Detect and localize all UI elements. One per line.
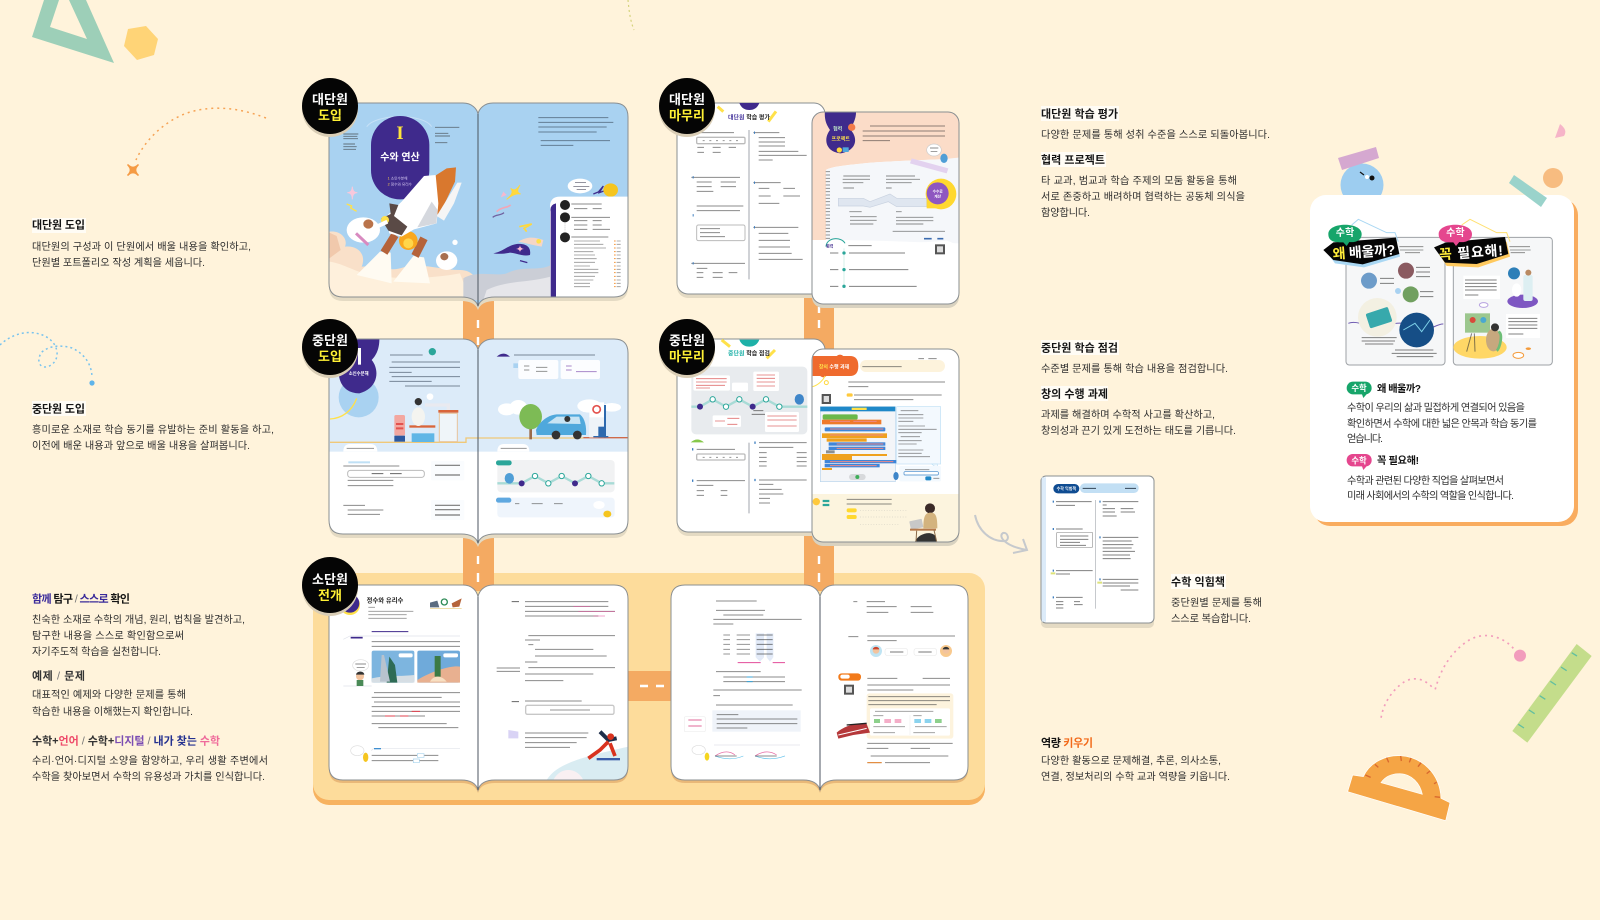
road: horizontal connector <box>627 671 672 701</box>
concept map <box>691 367 807 434</box>
page title: 중단원 학습 점검 <box>728 350 770 358</box>
text lines: intro copy <box>538 118 613 145</box>
text block: 왜 배울까?: 수학이 우리의 삶과 밀접하게 연결되어 있음을 <box>1347 401 1525 414</box>
decoration: teal bar over card edge <box>1509 175 1547 207</box>
illustration: ice skater with ice field <box>508 730 628 780</box>
page title: 대단원 학습 평가 <box>728 113 770 121</box>
badge: 중단원 마무리: 마무리 <box>669 349 705 364</box>
text block: 역량 키우기 <box>1041 736 1230 783</box>
book: 대단원 도입 spread <box>329 103 630 310</box>
road: left vertical <box>463 296 494 591</box>
text lines: left page corner notes <box>343 127 459 149</box>
title tag: 수학 꼭 필요해!: 꼭 필요해! <box>1438 242 1503 263</box>
panel: prior learning section <box>343 444 464 520</box>
section: check-up diagrams <box>692 745 800 761</box>
text block: 창의 수행 과제: 창의성과 끈기 있게 도전하는 태도를 기릅니다. <box>1041 424 1236 437</box>
text block: 예제 / 문제: 예제 / 문제 <box>32 668 85 682</box>
spiral binding <box>826 172 830 238</box>
panel: table of contents <box>550 197 630 300</box>
pages: 대단원 마무리 left page <box>677 103 825 298</box>
text block: 함께 탐구 / 스스로 확인 <box>32 592 245 658</box>
text block: 대단원 도입 <box>32 218 251 269</box>
panel: 수학 왜 배울까 / 꼭 필요해 card <box>1310 195 1578 526</box>
text block: 수학 익힘책: 스스로 복습합니다. <box>1171 613 1251 625</box>
text block: 왜 배울까?: 확인하면서 수학에 대한 넓은 안목과 학습 동기를 <box>1347 417 1537 430</box>
text block: 예제 / 문제: 학습한 내용을 이해했는지 확인합니다. <box>32 705 193 718</box>
table: decimal multiplication <box>723 633 785 682</box>
small text under tags <box>1399 247 1531 253</box>
text block: 꼭 필요해! <box>1347 454 1514 502</box>
panel: note box <box>684 710 801 732</box>
text lines: left page <box>713 601 802 705</box>
illustration: clouds <box>329 231 553 300</box>
formula box <box>526 705 614 714</box>
character: teacher with speech bubble <box>353 660 369 686</box>
check panel <box>826 238 952 288</box>
text block: 수학 익힘책 <box>1171 574 1262 625</box>
decoration: pink dotted trail with dot <box>1381 636 1526 722</box>
decoration: blue mascot behind card <box>1338 147 1384 206</box>
book: 소단원 전개 spread one <box>329 585 628 793</box>
emblem: 협력 프로젝트: 프로젝트 <box>831 136 850 143</box>
text block: 중단원 도입: 이전에 배운 내용과 앞으로 배울 내용을 살펴봅니다. <box>32 440 250 452</box>
workbook header <box>1053 483 1139 493</box>
text block: 꼭 필요해!: 수학과 관련된 다양한 직업을 살펴보면서 <box>1347 474 1504 487</box>
problems: text lines <box>691 133 807 277</box>
text block: 함께 탐구 / 스스로 확인: 함께 탐구 / 스스로 확인 <box>32 592 130 606</box>
text block: 중단원 학습 점검 <box>1041 340 1228 375</box>
tape measure illustration: 수수료 <box>933 189 943 194</box>
page heading: 정수와 유리수 <box>340 594 460 686</box>
title tag: 수학 왜 배울까? <box>1323 219 1400 267</box>
title tag: 수학 꼭 필요해! <box>1434 219 1510 267</box>
text block: 대단원 도입: 대단원의 구성과 이 단원에서 배울 내용을 확인하고, <box>32 240 251 253</box>
tape measure illustration <box>838 158 956 209</box>
illustration: unit emblem: 소인수분해 <box>349 370 369 377</box>
title tag: 수학 왜 배울까?: 수학 <box>1336 226 1354 239</box>
characters: two students <box>870 645 952 657</box>
text block: 대단원 도입: 단원별 포트폴리오 작성 계획을 세웁니다. <box>32 257 205 269</box>
text block: 역량 키우기: 연결, 정보처리의 수학 교과 역량을 키웁니다. <box>1041 771 1230 783</box>
text block: 협력 프로젝트: 서로 존중하고 배려하며 협력하는 공동체 의식을 <box>1041 190 1245 203</box>
badge: 대단원 도입 <box>302 78 358 137</box>
illustration: car, tree and station <box>497 354 621 439</box>
problems: text lines <box>691 439 704 442</box>
text lines: body copy <box>372 693 460 728</box>
page heading: 정수와 유리수: 정수와 유리수 <box>367 595 404 604</box>
badge: 중단원 마무리 <box>659 319 715 378</box>
decoration: orange circle and pink wedge <box>1543 124 1565 188</box>
illustration: pipeline and machines <box>330 393 628 442</box>
pages: 중단원 마무리 left page <box>677 339 825 536</box>
text block: 왜 배울까?: 얻습니다. <box>1347 433 1383 445</box>
workbook problems <box>1056 502 1138 608</box>
callout: speech bubble and mascot <box>568 179 618 197</box>
arrow: curly grey arrow to workbook <box>975 515 1027 553</box>
task header: 창의 수행 과제 <box>819 364 850 371</box>
text block: 수학+언어 / 수학+디지털 / 내가 찾는 수학: 수리·언어·디지털 소양을 함양하고, 우리 생활 주변에서 <box>32 754 268 767</box>
text block: 수학+언어 / 수학+디지털 / 내가 찾는 수학: 수학을 찾아보면서 수학의 유용성과 가치를 인식합니다. <box>32 771 265 783</box>
decoration: orange protractor <box>1348 756 1450 821</box>
pages: 창의 수행 과제 right page <box>810 349 962 546</box>
panel: learning map right page <box>496 444 615 517</box>
road: right vertical <box>804 296 834 591</box>
badge: 대단원 마무리: 마무리 <box>669 108 705 123</box>
text block: 중단원 학습 점검: 중단원 학습 점검 <box>1041 340 1118 354</box>
text lines: right page <box>848 602 955 641</box>
text block: 예제 / 문제 <box>32 668 193 718</box>
badge: 중단원 도입: 중단원 <box>312 333 348 348</box>
tape measure illustration: 계산 <box>934 193 942 198</box>
decoration: green set square <box>32 0 114 63</box>
label chip: 수학 green: 수학 <box>1351 383 1367 393</box>
text lines: right page <box>525 602 615 616</box>
text block: 대단원 학습 평가 <box>1041 106 1270 141</box>
photo: rocket lift-off <box>417 651 460 683</box>
illustration: unit pill: 2 정수와 유리수 <box>388 181 413 186</box>
text block: 중단원 도입: 흥미로운 소재로 학습 동기를 유발하는 준비 활동을 하고, <box>32 423 274 436</box>
book: 중단원 도입 spread <box>328 337 630 547</box>
text block: 꼭 필요해!: 미래 사회에서의 수학의 역할을 인식합니다. <box>1347 490 1514 502</box>
text block: 예제 / 문제: 대표적인 예제와 다양한 문제를 통해 <box>32 688 186 701</box>
title tag: 수학 왜 배울까?: 왜 배울까? <box>1332 242 1396 262</box>
illustration: unit pill: 1 소인수분해 <box>388 176 408 181</box>
illustration: astronauts <box>347 217 458 270</box>
text block: 수학 익힘책: 중단원별 문제를 통해 <box>1171 596 1262 609</box>
badge: 대단원 마무리: 대단원 <box>669 92 705 107</box>
illustration: unit pill: 수와 연산 <box>380 150 420 163</box>
spread page: why learn <box>1346 237 1445 365</box>
callout: mascot <box>927 144 948 163</box>
text block: 왜 배울까? <box>1347 382 1537 445</box>
text block: 협력 프로젝트 <box>1041 152 1245 219</box>
text block: 수학 익힘책: 수학 익힘책 <box>1171 574 1225 588</box>
label chip: 수학 pink <box>1347 454 1372 470</box>
panel: top info cards <box>513 360 600 379</box>
text lines <box>372 642 460 646</box>
text block: 수학+언어 / 수학+디지털 / 내가 찾는 수학 <box>32 734 268 783</box>
text block: 수학+언어 / 수학+디지털 / 내가 찾는 수학: 수학+언어 / 수학+디지털 / 내가 찾는 수학 <box>32 734 220 748</box>
text lines: project notes <box>843 176 945 231</box>
illustration: rocket characters <box>430 598 462 608</box>
section: check-up with mascot <box>351 746 460 763</box>
text block: 협력 프로젝트: 함양합니다. <box>1041 207 1090 219</box>
text block: 함께 탐구 / 스스로 확인: 친숙한 소재로 수학의 개념, 원리, 법칙을 발견하고, <box>32 613 245 626</box>
badge: 소단원 전개: 소단원 <box>312 572 348 587</box>
panel: 역량 키우기 section <box>837 673 953 763</box>
illustration: stars and sparkles <box>347 185 543 263</box>
badge: 소단원 전개 <box>302 557 358 616</box>
text block: 함께 탐구 / 스스로 확인: 탐구한 내용을 스스로 확인함으로써 <box>32 630 184 642</box>
block coding screen <box>820 407 899 482</box>
label chip: 수학 green <box>1347 382 1372 398</box>
badge: 대단원 도입: 대단원 <box>312 92 348 107</box>
task header <box>813 355 945 387</box>
title tag: 수학 꼭 필요해!: 수학 <box>1446 226 1465 239</box>
decoration: blue dotted trail <box>0 332 95 386</box>
decoration: top dotted trail <box>628 0 634 30</box>
text block: 역량 키우기: 다양한 활동으로 문제해결, 추론, 의사소통, <box>1041 754 1221 767</box>
emblem: 협력 프로젝트 <box>825 110 856 153</box>
emblem: 협력 프로젝트: 협력 <box>833 126 843 133</box>
workbook header: 수학 익힘책 <box>1057 485 1076 491</box>
badge: 소단원 전개: 전개 <box>318 588 342 603</box>
spread page: really needed <box>1453 237 1552 365</box>
badge: 중단원 도입: 도입 <box>318 349 342 364</box>
explanation panel <box>897 407 941 481</box>
decoration: green ruler <box>1512 644 1592 743</box>
illustration: unit pill <box>367 116 432 199</box>
text lines: intro <box>863 126 945 141</box>
reflection section with student <box>813 498 937 542</box>
panel: 소단원 전개 orange base <box>313 573 985 805</box>
text block: 중단원 도입 <box>32 401 274 452</box>
text block: 창의 수행 과제 <box>1041 386 1236 437</box>
text block: 창의 수행 과제: 창의 수행 과제 <box>1041 386 1108 400</box>
decoration: orange dotted trail with star <box>128 108 266 175</box>
text block: 함께 탐구 / 스스로 확인: 자기주도적 학습을 실천합니다. <box>32 646 161 658</box>
illustration: unit emblem <box>330 337 379 419</box>
text block: 역량 키우기: 역량 키우기 <box>1041 736 1093 750</box>
badge: 대단원 도입: 도입 <box>318 108 342 123</box>
text block: 꼭 필요해!: 꼭 필요해! <box>1377 454 1419 467</box>
decoration: yellow hexagon <box>124 26 158 60</box>
text block: 중단원 도입: 중단원 도입 <box>32 402 85 416</box>
text block: 협력 프로젝트: 협력 프로젝트 <box>1041 152 1105 166</box>
illustration: space shuttle <box>357 167 462 283</box>
text block: 중단원 학습 점검: 수준별 문제를 통해 학습 내용을 점검합니다. <box>1041 362 1228 375</box>
check panel: 협력 <box>826 242 834 248</box>
text block: 대단원 학습 평가: 대단원 학습 평가 <box>1041 106 1118 120</box>
text lines <box>848 382 945 400</box>
text block: 대단원 학습 평가: 다양한 문제를 통해 성취 수준을 스스로 되돌아봅니다. <box>1041 128 1270 141</box>
photo: rocket launch pad <box>372 651 414 683</box>
text block: 창의 수행 과제: 과제를 해결하며 수학적 사고를 확산하고, <box>1041 408 1215 421</box>
workbook page <box>1041 476 1154 628</box>
pages: 협력 프로젝트 right page <box>810 110 960 308</box>
text block: 협력 프로젝트: 타 교과, 범교과 학습 주제의 모둠 활동을 통해 <box>1041 174 1237 187</box>
badge: 중단원 도입 <box>302 319 358 378</box>
text lines: heading copy <box>389 355 460 386</box>
badge: 중단원 마무리: 중단원 <box>669 333 705 348</box>
illustration: unit pill: I <box>396 123 404 144</box>
text block: 대단원 도입: 대단원 도입 <box>32 218 85 232</box>
badge: 대단원 마무리 <box>659 78 715 137</box>
book: 소단원 전개 spread two <box>671 585 968 793</box>
text block: 왜 배울까?: 왜 배울까? <box>1377 382 1421 395</box>
label chip: 수학 pink: 수학 <box>1351 455 1367 465</box>
